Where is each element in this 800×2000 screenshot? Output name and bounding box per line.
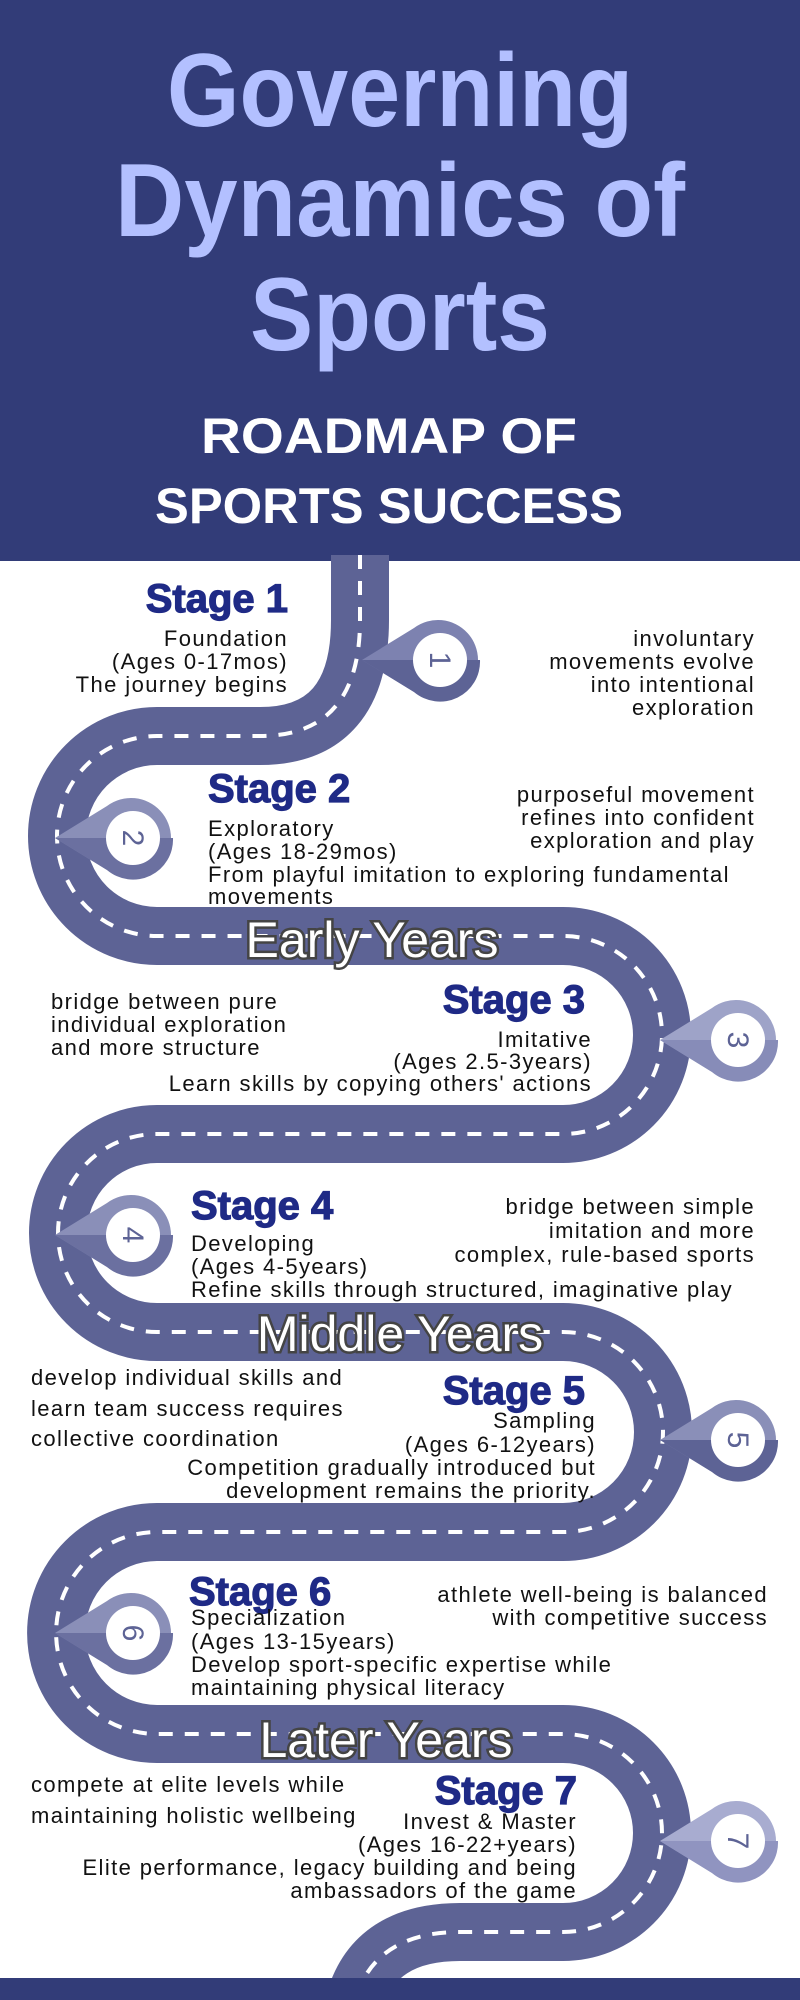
stage 4 note: complex, rule-based sports <box>454 1242 755 1267</box>
stage 4: Stage 4 <box>191 1184 334 1228</box>
stage 2 <box>208 767 730 909</box>
title: Sports <box>250 257 550 373</box>
stage 7: Invest & Master <box>403 1809 577 1834</box>
stage 6 <box>189 1570 612 1700</box>
road <box>56 555 663 2000</box>
subtitle: ROADMAP OF <box>201 408 577 464</box>
stage 1: Foundation <box>164 626 288 651</box>
stage 6: Specialization <box>191 1605 346 1630</box>
stage 2: Exploratory <box>208 816 335 841</box>
pin 2 <box>55 798 173 880</box>
stage 5 note: develop individual skills and <box>31 1365 343 1390</box>
stage 5 note <box>31 1365 344 1451</box>
pin 1 <box>362 620 480 702</box>
pin 4: 4 <box>116 1227 149 1243</box>
Middle Years label: Middle Years <box>257 1306 543 1362</box>
stage 1 <box>76 577 288 697</box>
stage 1 note: involuntary <box>633 626 755 651</box>
stage 5: Competition gradually introduced but <box>187 1455 596 1480</box>
header panel <box>0 0 800 561</box>
pin 1: 1 <box>423 652 456 668</box>
stage 7: Stage 7 <box>435 1769 577 1813</box>
pin 3: 3 <box>721 1032 754 1048</box>
stage 3: (Ages 2.5-3years) <box>393 1049 592 1074</box>
stage 5: Sampling <box>493 1408 596 1433</box>
stage 6: Stage 6 <box>189 1570 331 1614</box>
bottom band <box>0 1978 800 2000</box>
title: Governing <box>167 33 633 149</box>
stage 7: ambassadors of the game <box>290 1878 577 1903</box>
title: Dynamics of <box>115 143 685 259</box>
stage 7: Elite performance, legacy building and being <box>82 1855 577 1880</box>
stage 6: (Ages 13-15years) <box>191 1629 396 1654</box>
stage 7 note <box>31 1772 357 1828</box>
stage 5: development remains the priority. <box>226 1478 596 1503</box>
stage 5: Stage 5 <box>443 1369 585 1413</box>
subtitle: SPORTS SUCCESS <box>155 478 623 534</box>
pin 7: 7 <box>721 1833 754 1849</box>
pin 6 <box>55 1593 173 1675</box>
stage 3: Imitative <box>497 1027 592 1052</box>
stage 7 note: compete at elite levels while <box>31 1772 346 1797</box>
stage 5 note: learn team success requires <box>31 1396 344 1421</box>
stage 6 note: athlete well-being is balanced <box>437 1582 768 1607</box>
stage 6: Develop sport-specific expertise while <box>191 1652 612 1677</box>
stage 7 <box>82 1769 577 1903</box>
pin 3 <box>660 1000 778 1082</box>
stage 2 note: refines into confident <box>521 805 755 830</box>
Later Years label: Later Years <box>260 1712 512 1768</box>
pin 5: 5 <box>721 1432 754 1448</box>
stage 2: Stage 2 <box>208 767 350 811</box>
stage 4 note: bridge between simple <box>505 1194 755 1219</box>
stage 2: (Ages 18-29mos) <box>208 839 398 864</box>
pin 2: 2 <box>116 830 149 846</box>
stage 4: (Ages 4-5years) <box>191 1254 369 1279</box>
stage 1: (Ages 0-17mos) <box>112 649 288 674</box>
pin 5 <box>660 1400 778 1482</box>
stage 6 note: with competitive success <box>491 1605 768 1630</box>
stage 6: maintaining physical literacy <box>191 1675 506 1700</box>
stage 1 note: exploration <box>632 695 755 720</box>
stage 3: Learn skills by copying others' actions <box>169 1071 592 1096</box>
pin 6: 6 <box>116 1625 149 1641</box>
stage 3 note: and more structure <box>51 1035 261 1060</box>
stage 2 note <box>517 782 755 853</box>
stage 2: movements <box>208 884 334 909</box>
Early Years label: Early Years <box>246 912 498 968</box>
stage 1 note: movements evolve <box>549 649 755 674</box>
stage 2 note: exploration and play <box>530 828 755 853</box>
stage 7 note: maintaining holistic wellbeing <box>31 1803 357 1828</box>
stage 3 note: bridge between pure <box>51 989 278 1014</box>
stage 1: Stage 1 <box>146 577 288 621</box>
stage 6 note <box>437 1582 768 1630</box>
pin 7 <box>660 1801 778 1883</box>
stage 3: Stage 3 <box>443 978 585 1022</box>
stage 3 note <box>51 989 287 1060</box>
stage 2 note: purposeful movement <box>517 782 755 807</box>
stage 4 note: imitation and more <box>549 1218 755 1243</box>
stage 4: Developing <box>191 1231 315 1256</box>
stage 4: Refine skills through structured, imaginative play <box>191 1277 733 1302</box>
subtitle <box>155 408 623 534</box>
stage 5 note: collective coordination <box>31 1426 280 1451</box>
stage 4 note <box>454 1194 755 1267</box>
title <box>115 33 685 373</box>
stage 1 note: into intentional <box>591 672 755 697</box>
stage 1: The journey begins <box>76 672 288 697</box>
stage 5: (Ages 6-12years) <box>405 1432 596 1457</box>
stage 3 note: individual exploration <box>51 1012 287 1037</box>
stage 1 note <box>549 626 755 720</box>
stage 3 <box>169 978 592 1096</box>
stage 7: (Ages 16-22+years) <box>358 1832 577 1857</box>
stage 5 <box>187 1369 596 1503</box>
stage 2: From playful imitation to exploring fundamental <box>208 862 730 887</box>
pin 4 <box>55 1195 173 1277</box>
stage 4 <box>191 1184 733 1302</box>
